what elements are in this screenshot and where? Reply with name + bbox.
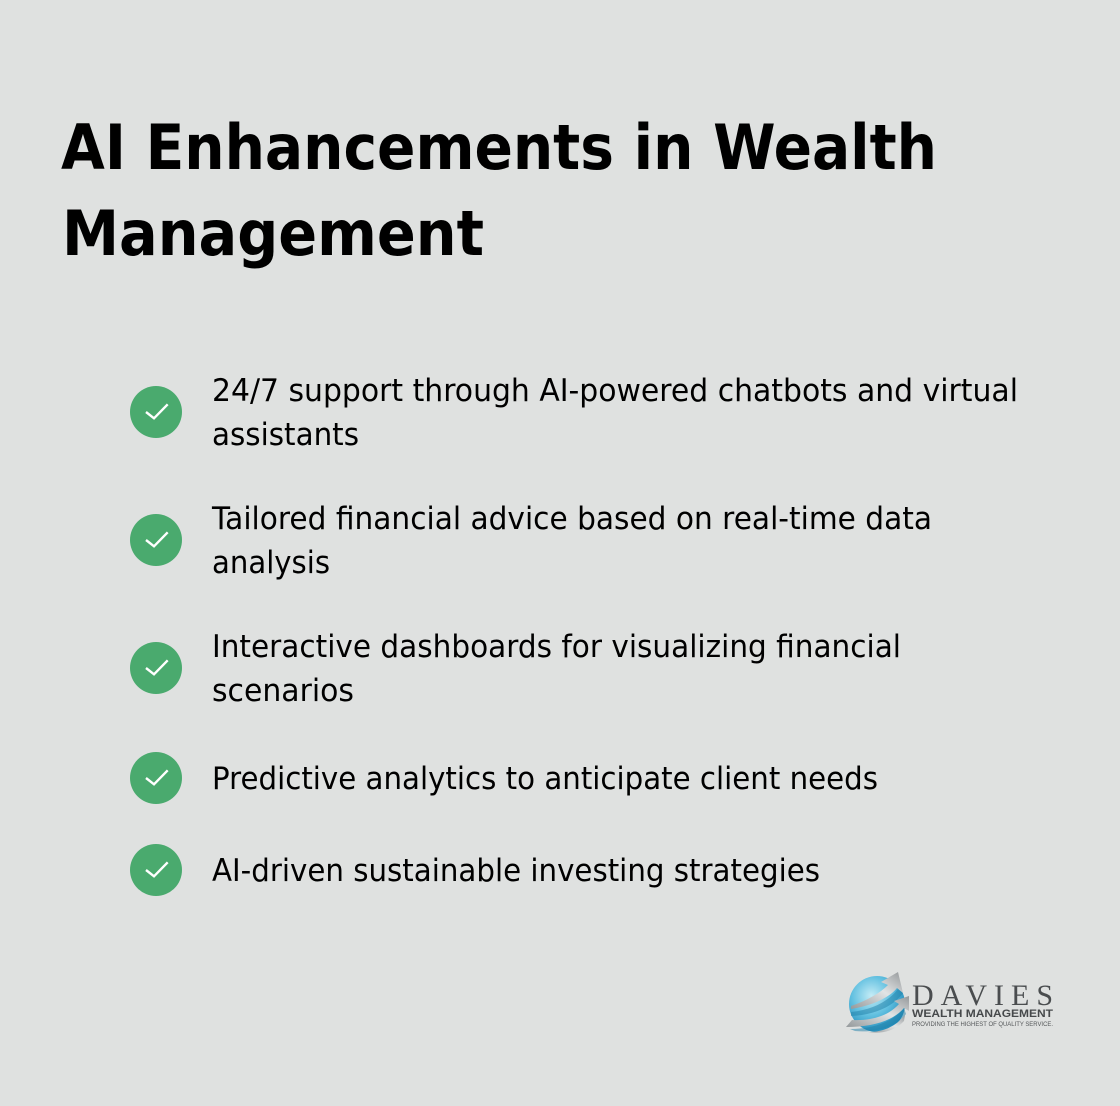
icon: check 3 bbox=[130, 642, 182, 694]
logo wordmark: DAVIES bbox=[912, 979, 1053, 1012]
text: item 2: analysis bbox=[212, 545, 330, 581]
text: item 1: 24/7 support through AI-powered chatbots and virtual bbox=[212, 373, 1018, 409]
item 3: dashboards bbox=[130, 629, 901, 709]
text: item 3: scenarios bbox=[212, 673, 354, 709]
title bbox=[61, 111, 937, 270]
item 2: tailored advice bbox=[130, 501, 932, 581]
text: item 3: Interactive dashboards for visualizing financial bbox=[212, 629, 901, 665]
text: item 2 bbox=[211, 501, 932, 581]
item 5: sustainable investing bbox=[130, 844, 820, 896]
logo subtitle: WEALTH MANAGEMENT bbox=[912, 1008, 1053, 1020]
text: item 2: Tailored financial advice based on real-time data bbox=[211, 501, 932, 537]
logo: Davies Wealth Management bbox=[846, 972, 1053, 1033]
icon: globe with arrows bbox=[846, 972, 909, 1033]
text: item 1: assistants bbox=[212, 417, 359, 453]
checklist bbox=[130, 373, 1018, 896]
title: Management bbox=[62, 197, 484, 270]
icon: check 2 bbox=[130, 514, 182, 566]
icon: check 1 bbox=[130, 386, 182, 438]
icon: check 5 bbox=[130, 844, 182, 896]
text: item 4: Predictive analytics to anticipate client needs bbox=[212, 761, 878, 797]
text: item 5: AI-driven sustainable investing strategies bbox=[212, 853, 820, 889]
text: item 1 bbox=[212, 373, 1018, 453]
title: AI Enhancements in Wealth bbox=[61, 111, 937, 184]
logo tagline: PROVIDING THE HIGHEST OF QUALITY SERVICE. bbox=[912, 1021, 1053, 1028]
item 4: predictive analytics bbox=[130, 752, 878, 804]
item 1: 24/7 support bbox=[130, 373, 1018, 453]
icon: check 4 bbox=[130, 752, 182, 804]
text: item 3 bbox=[212, 629, 901, 709]
